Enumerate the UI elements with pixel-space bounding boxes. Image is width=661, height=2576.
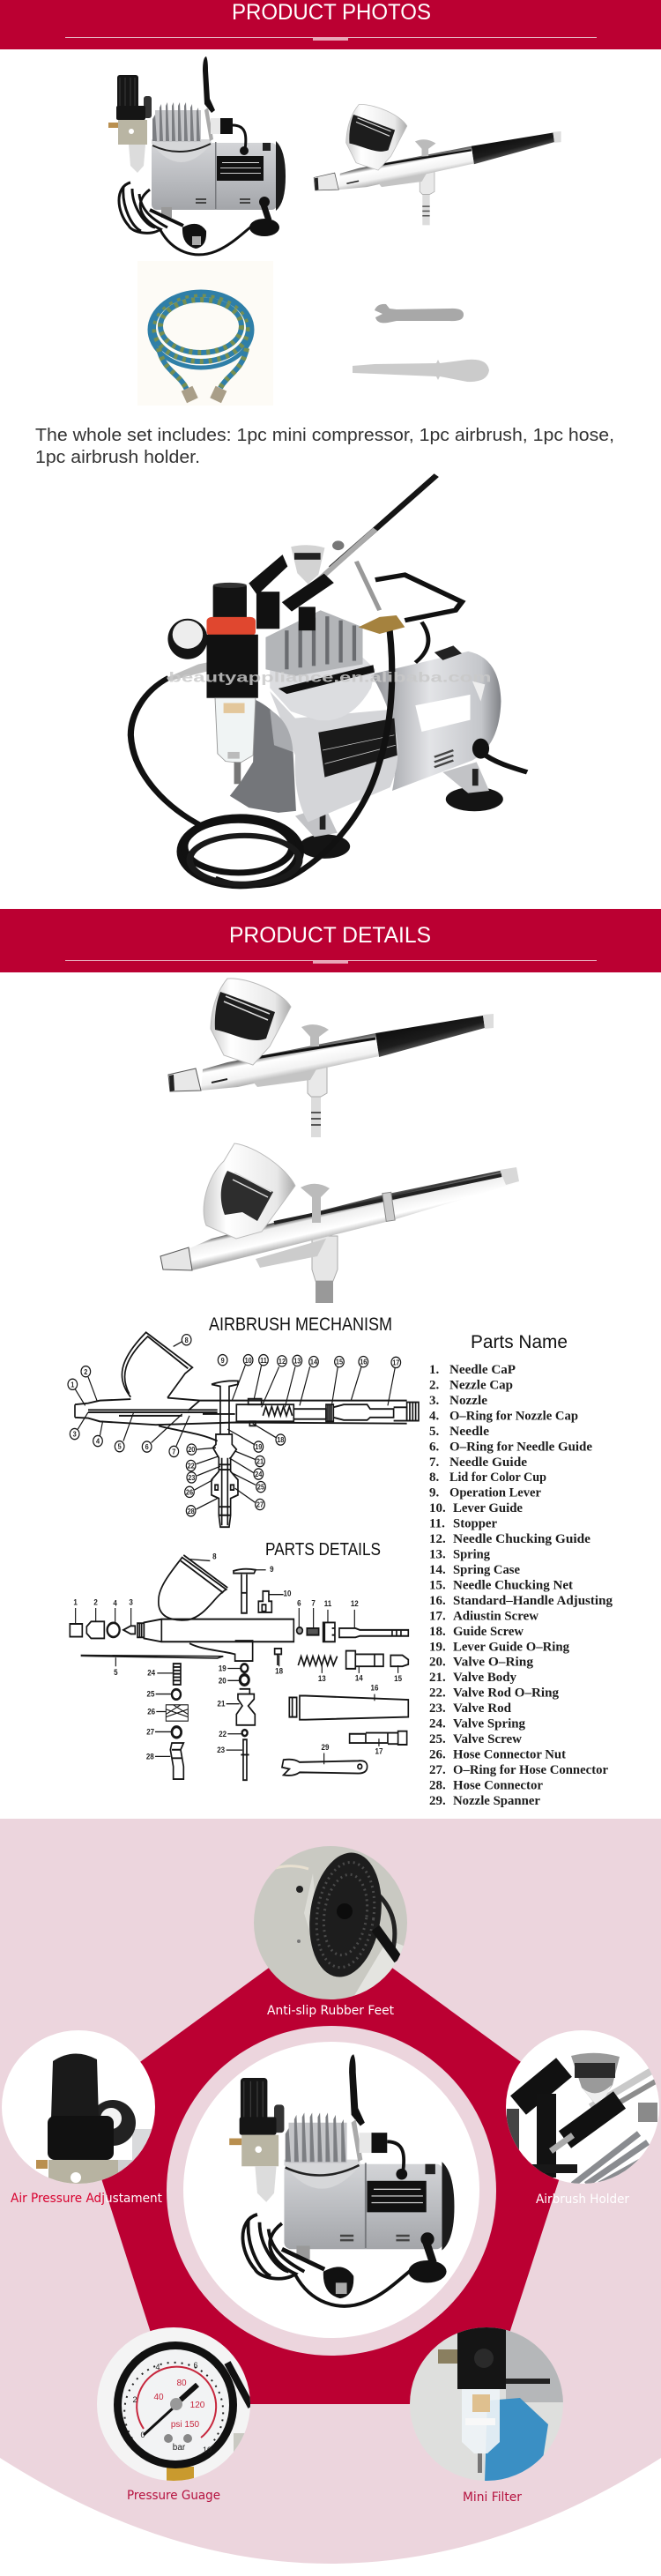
diagram: exploded parts: 18 <box>275 1666 283 1676</box>
diagram: airbrush mechanism cross-section: 10 <box>245 1356 252 1365</box>
diagram: airbrush mechanism cross-section <box>68 1332 419 1527</box>
list: parts name: 3. <box>429 1394 439 1408</box>
center photo: compressor <box>229 2054 454 2306</box>
diagram: exploded parts: 13 <box>318 1674 326 1683</box>
diagram: airbrush mechanism cross-section: 4 <box>96 1437 100 1446</box>
list: parts name: 29. <box>429 1794 446 1808</box>
list: parts name: Hose Connector Nut <box>453 1747 566 1761</box>
photo: nozzle spanner <box>375 304 464 323</box>
list: parts name: Valve Spring <box>453 1717 525 1731</box>
list: parts name: Spring Case <box>453 1563 520 1577</box>
list: parts name: 14. <box>429 1563 446 1577</box>
list: parts name: Nezzle Cap <box>449 1379 513 1393</box>
feature circle: pressure gauge <box>97 2327 251 2482</box>
diagram: airbrush mechanism cross-section: 18 <box>277 1436 285 1444</box>
diagram: exploded parts: 11 <box>324 1599 331 1608</box>
diagram: airbrush mechanism cross-section: 3 <box>73 1430 77 1439</box>
list: parts name: 17. <box>429 1609 446 1623</box>
diagram: airbrush mechanism cross-section: 5 <box>118 1442 122 1451</box>
diagram: exploded parts: 25 <box>147 1689 155 1699</box>
diagram: airbrush mechanism cross-section: 12 <box>279 1357 286 1366</box>
photo: compressor with airbrush on holder: beautyappliance.en.alibaba.com <box>168 669 491 685</box>
list: parts name: Nozzle <box>449 1394 487 1408</box>
section header: product photos <box>0 0 661 49</box>
diagram: airbrush mechanism cross-section: 1 <box>71 1381 75 1389</box>
red pentagon connector <box>78 1923 583 2404</box>
photo: cleaning tool <box>353 360 489 382</box>
diagram: exploded parts: 24 <box>147 1668 155 1678</box>
diagram: airbrush mechanism cross-section: 20 <box>188 1446 196 1454</box>
diagram: airbrush mechanism cross-section: 7 <box>172 1448 176 1456</box>
list: parts name: O–Ring for Needle Guide <box>449 1440 592 1454</box>
list: parts name: Needle Chucking Guide <box>453 1532 590 1546</box>
diagram: exploded parts: 6 <box>297 1598 301 1607</box>
diagram: airbrush mechanism cross-section: 25 <box>257 1483 265 1492</box>
feature circle: pressure gauge: 10 <box>203 2446 212 2454</box>
diagram: airbrush mechanism cross-section: 23 <box>188 1473 196 1482</box>
diagram: exploded parts: 7 <box>311 1598 316 1607</box>
diagram: airbrush mechanism cross-section: 2 <box>84 1367 88 1376</box>
diagram: airbrush mechanism cross-section: 16 <box>360 1358 368 1366</box>
diagram: airbrush mechanism cross-section: 8 <box>185 1336 189 1344</box>
feature circle: pressure gauge: 6 <box>193 2361 198 2370</box>
heading: airbrush mechanism: AIRBRUSH MECHANISM <box>209 1314 392 1335</box>
diagram: airbrush mechanism cross-section: 13 <box>293 1357 301 1366</box>
list: parts name: 8. <box>429 1470 439 1485</box>
diagram: exploded parts: 3 <box>129 1597 133 1607</box>
list: parts name: Standard–Handle Adjusting <box>453 1594 613 1608</box>
diagram: airbrush mechanism cross-section: 27 <box>256 1500 264 1509</box>
list: parts name: 24. <box>429 1717 446 1731</box>
feature circle: pressure gauge: bar <box>173 2443 186 2453</box>
list: parts name: Guide Screw <box>453 1625 524 1639</box>
diagram: airbrush mechanism cross-section: 9 <box>221 1356 225 1365</box>
feature circle: airbrush holder <box>506 2030 660 2185</box>
list: parts name: Needle Guide <box>449 1456 527 1470</box>
list: parts name: 18. <box>429 1625 446 1639</box>
list: parts name: 19. <box>429 1640 446 1654</box>
text: set contents: 1pc airbrush holder. <box>35 448 200 467</box>
label: air pressure adjustment: Air Pressure Adjustament <box>11 2192 162 2206</box>
diagram: exploded parts: 9 <box>270 1565 274 1574</box>
diagram: exploded parts: 12 <box>351 1599 359 1608</box>
diagram: airbrush mechanism cross-section: 6 <box>145 1443 149 1451</box>
feature circle: rubber feet <box>254 1846 410 2001</box>
photo: compressor with airbrush on holder <box>130 475 527 885</box>
list: parts name: Lid for Color Cup <box>449 1470 546 1485</box>
label: pressure gauge: Pressure Guage <box>127 2489 220 2503</box>
list: parts name: Nozzle Spanner <box>453 1794 540 1808</box>
list: parts name: 16. <box>429 1594 446 1608</box>
list: parts name: 7. <box>429 1456 439 1470</box>
diagram: exploded parts: 1 <box>73 1597 78 1607</box>
feature circle: mini filter <box>410 2327 564 2482</box>
list: parts name: 13. <box>429 1548 446 1562</box>
list: parts name: Spring <box>453 1548 490 1562</box>
list: parts name: 1. <box>429 1363 439 1377</box>
list: parts name: 22. <box>429 1686 446 1701</box>
list: parts name <box>429 1363 613 1808</box>
diagram: airbrush mechanism cross-section: 22 <box>188 1462 195 1470</box>
diagram: exploded parts <box>70 1552 408 1780</box>
list: parts name: Operation Lever <box>449 1486 541 1500</box>
label: anti-slip rubber feet: Anti-slip Rubber Feet <box>267 2004 395 2018</box>
diagram: exploded parts: 22 <box>219 1729 227 1738</box>
diagram: exploded parts: 28 <box>146 1752 154 1761</box>
diagram: exploded parts: 26 <box>147 1707 155 1716</box>
feature circle: pressure gauge: 2 <box>132 2395 137 2404</box>
center ring <box>167 2026 496 2356</box>
list: parts name: 27. <box>429 1763 446 1777</box>
diagram: exploded parts: 10 <box>284 1589 292 1598</box>
heading: parts name: Parts Name <box>471 1332 568 1352</box>
text: set contents: The whole set includes: 1pc mini compressor, 1pc airbrush, 1pc hose, <box>35 426 614 445</box>
diagram: exploded parts: 2 <box>93 1597 98 1607</box>
center white circle <box>183 2042 479 2338</box>
photo: airbrush with black handle <box>168 979 494 1137</box>
diagram: exploded parts: 29 <box>322 1743 330 1752</box>
list: parts name: Valve Screw <box>453 1732 522 1746</box>
feature circle: pressure gauge: 120 <box>190 2401 205 2410</box>
list: parts name: Valve Rod O–Ring <box>453 1686 559 1701</box>
list: parts name: Valve O–Ring <box>453 1656 534 1670</box>
list: parts name: Valve Body <box>453 1671 516 1685</box>
label: airbrush holder: Airbrush Holder <box>536 2193 629 2207</box>
list: parts name: 26. <box>429 1747 446 1761</box>
list: parts name: Adiustin Screw <box>453 1609 538 1623</box>
diagram: exploded parts: 23 <box>217 1746 225 1754</box>
feature circle: pressure gauge: 40 <box>153 2393 164 2402</box>
list: parts name: 23. <box>429 1701 446 1716</box>
heading: parts details: PARTS DETAILS <box>265 1540 381 1560</box>
diagram: exploded parts: 8 <box>212 1552 217 1561</box>
diagram: airbrush mechanism cross-section: 11 <box>260 1356 267 1365</box>
list: parts name: O–Ring for Nozzle Cap <box>449 1409 578 1423</box>
list: parts name: 25. <box>429 1732 446 1746</box>
list: parts name: Needle <box>449 1425 489 1439</box>
section header: product details: PRODUCT DETAILS <box>229 923 431 948</box>
text: set contents <box>35 426 614 467</box>
diagram: exploded parts: 14 <box>355 1673 363 1682</box>
list: parts name: 28. <box>429 1778 446 1792</box>
diagram: exploded parts: 19 <box>219 1664 227 1673</box>
diagram: exploded parts: 4 <box>113 1598 117 1607</box>
diagram: exploded parts: 5 <box>114 1667 118 1677</box>
list: parts name: Needle CaP <box>449 1363 516 1377</box>
diagram: exploded parts: 16 <box>371 1683 379 1693</box>
list: parts name: Hose Connector <box>453 1778 543 1792</box>
diagram: airbrush mechanism cross-section: 28 <box>188 1507 195 1515</box>
list: parts name: Valve Rod <box>453 1701 512 1716</box>
diagram: airbrush mechanism cross-section: 14 <box>310 1358 318 1366</box>
list: parts name: 5. <box>429 1425 439 1439</box>
list: parts name: 9. <box>429 1486 439 1500</box>
feature circle: pressure gauge: 80 <box>176 2379 187 2388</box>
list: parts name: 2. <box>429 1379 439 1393</box>
photo: air hose <box>137 261 273 406</box>
list: parts name: Lever Guide <box>453 1501 523 1515</box>
list: parts name: 11. <box>429 1517 445 1531</box>
diagram: airbrush mechanism cross-section: 19 <box>255 1443 263 1451</box>
diagram: airbrush mechanism cross-section: 15 <box>336 1358 344 1366</box>
list: parts name: Stopper <box>453 1517 497 1531</box>
section header: product details <box>0 909 661 972</box>
feature circle: pressure gauge: 0 <box>140 2431 145 2439</box>
list: parts name: 20. <box>429 1656 446 1670</box>
list: parts name: 4. <box>429 1409 439 1423</box>
diagram: airbrush mechanism cross-section: 21 <box>256 1457 264 1466</box>
panel: pink feature background <box>0 1819 661 2564</box>
list: parts name: Needle Chucking Net <box>453 1578 573 1592</box>
section header: product photos: PRODUCT PHOTOS <box>232 0 431 25</box>
diagram: exploded parts: 17 <box>375 1746 383 1756</box>
diagram: airbrush mechanism cross-section: 26 <box>186 1488 194 1497</box>
diagram: exploded parts: 21 <box>218 1699 226 1709</box>
list: parts name: 21. <box>429 1671 446 1685</box>
photo: airbrush <box>314 104 561 225</box>
diagram: exploded parts: 15 <box>394 1674 402 1683</box>
list: parts name: 12. <box>429 1532 446 1546</box>
feature circle: pressure gauge: psi 150 <box>171 2420 200 2430</box>
list: parts name: 6. <box>429 1440 439 1454</box>
list: parts name: 15. <box>429 1578 446 1592</box>
label: mini filter: Mini Filter <box>463 2490 522 2505</box>
photo: mini compressor <box>108 56 286 255</box>
diagram: airbrush mechanism cross-section: 24 <box>255 1470 263 1478</box>
feature circle: pressure gauge: 4 <box>155 2363 160 2371</box>
feature circle: air pressure adjustment <box>2 2030 156 2185</box>
list: parts name: O–Ring for Hose Connector <box>453 1763 608 1777</box>
diagram: airbrush mechanism cross-section: 17 <box>392 1359 400 1367</box>
photo: airbrush all chrome <box>160 1143 519 1303</box>
list: parts name: Lever Guide O–Ring <box>453 1640 569 1654</box>
diagram: exploded parts: 27 <box>146 1727 154 1737</box>
list: parts name: 10. <box>429 1501 446 1515</box>
diagram: exploded parts: 20 <box>219 1676 227 1685</box>
